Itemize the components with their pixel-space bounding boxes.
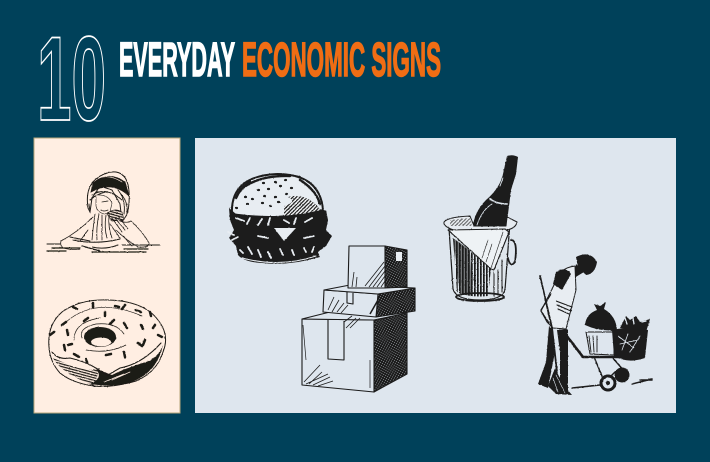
middle box [323, 285, 415, 317]
panel: left [34, 138, 180, 413]
title: EVERYDAY [119, 34, 235, 87]
worker [538, 254, 597, 392]
broom [539, 276, 572, 395]
bottom box [302, 310, 407, 392]
cart [563, 302, 652, 390]
top box [348, 246, 407, 288]
title number: 10: 10 [37, 12, 106, 146]
icon: stacked boxes [302, 246, 415, 392]
panel: right [195, 138, 676, 413]
icon: donut [49, 300, 166, 386]
icon: champagne bucket [444, 155, 518, 301]
icon: street sweeper with cart [538, 254, 652, 395]
icon: girl eating noodles [47, 172, 160, 252]
text: ECONOMIC SIGNS [242, 34, 441, 87]
icon: burger [228, 174, 332, 264]
